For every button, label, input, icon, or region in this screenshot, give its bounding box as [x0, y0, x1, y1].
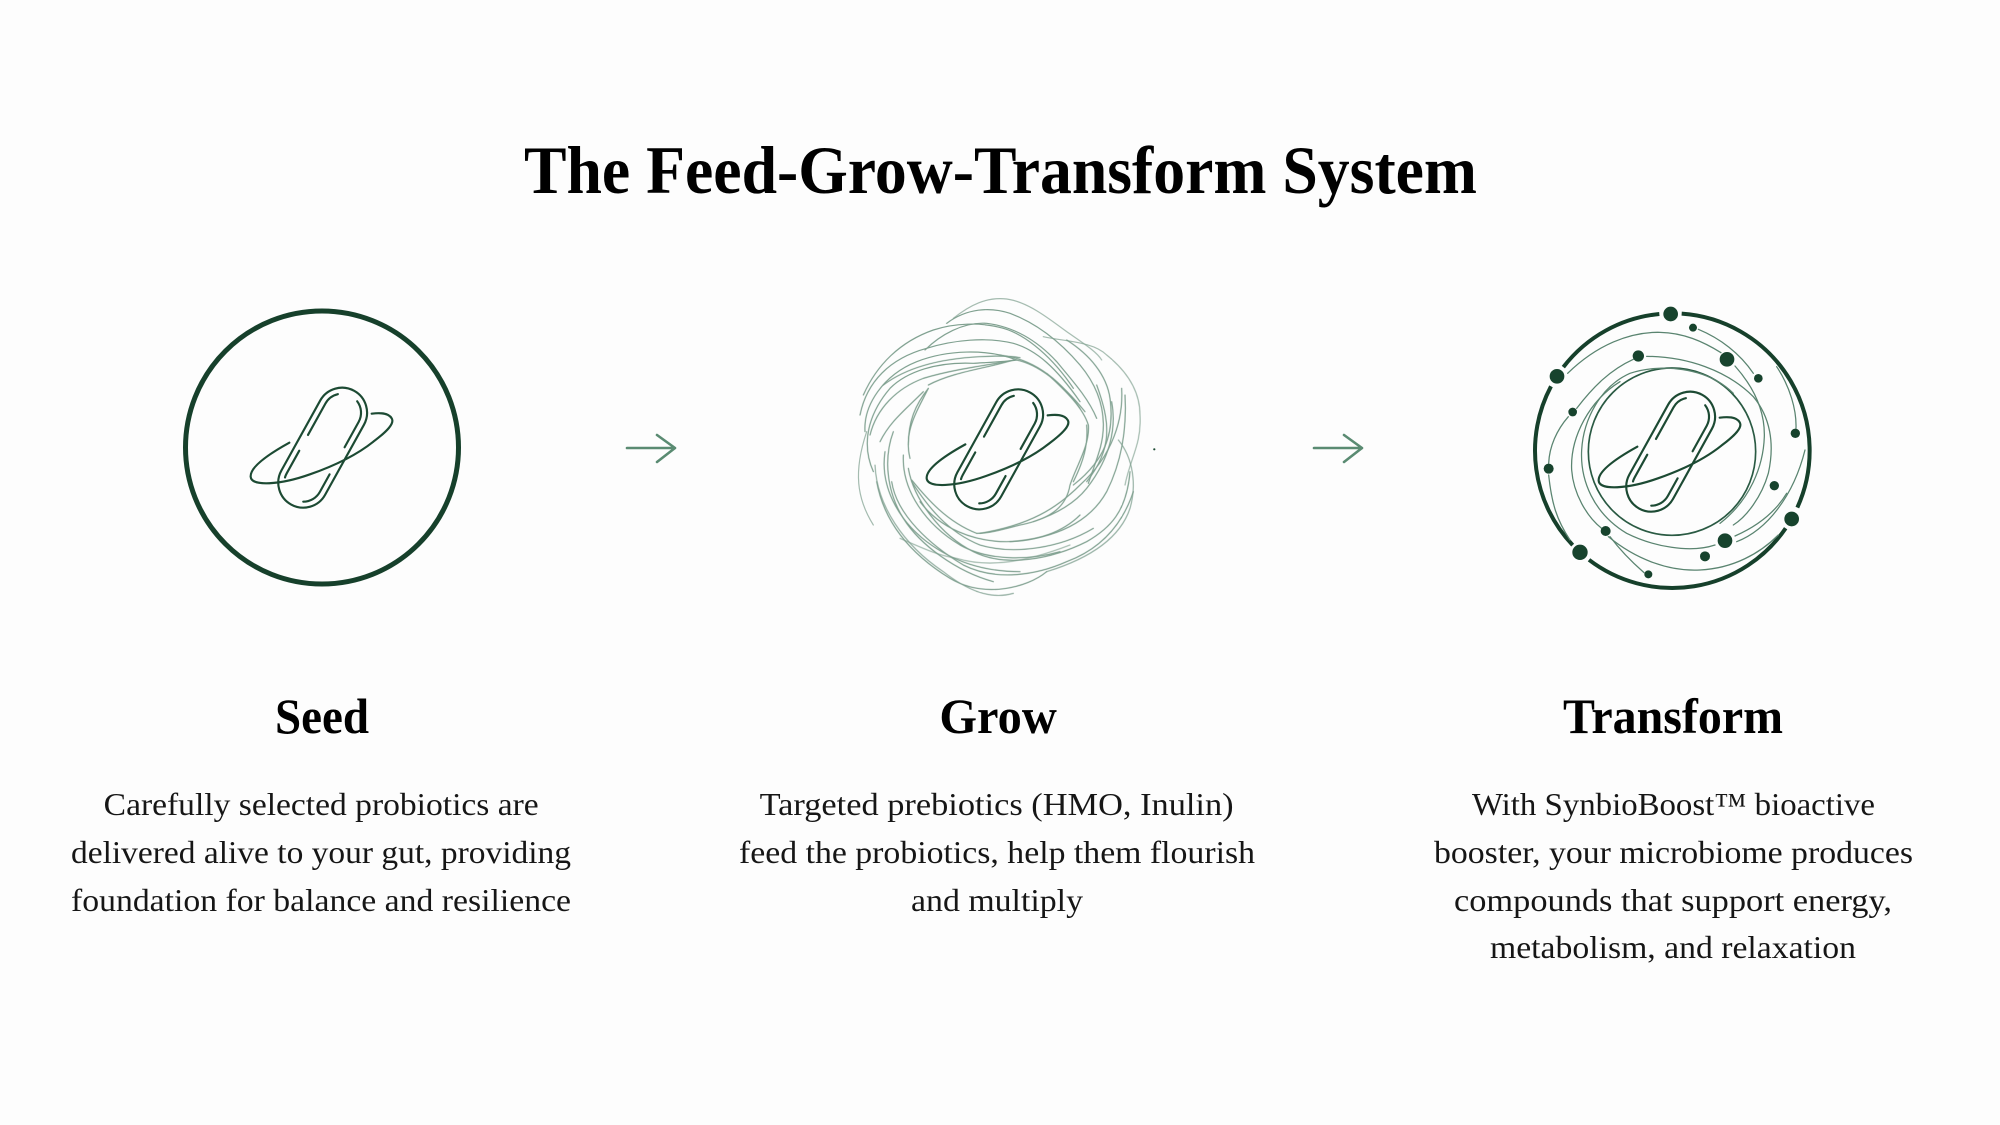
- panel: grow: [739, 688, 1255, 918]
- text block: transform description: compounds that support energy,: [1454, 882, 1892, 918]
- panel: seed: [71, 688, 571, 918]
- text block: transform description: metabolism, and relaxation: [1490, 929, 1856, 965]
- text block: seed description: Carefully selected probiotics are: [104, 786, 539, 822]
- text block: transform description: booster, your microbiome produces: [1434, 834, 1913, 870]
- text block: transform description: With SynbioBoost™ bioactive: [1472, 786, 1875, 822]
- heading: transform: Transform: [1563, 688, 1783, 744]
- text block: seed description: foundation for balance and resilience: [71, 882, 571, 918]
- text block: transform description: [1434, 786, 1913, 965]
- text block: grow description: [739, 786, 1255, 918]
- panel: transform: [1434, 688, 1913, 965]
- arrow: seed to grow: [627, 435, 675, 462]
- arrow: grow to transform: [1314, 435, 1362, 462]
- text block: seed description: delivered alive to your gut, providing: [71, 834, 571, 870]
- heading: seed: Seed: [275, 688, 369, 744]
- title: The Feed-Grow-Transform System: [524, 132, 1477, 208]
- text block: seed description: [71, 786, 571, 918]
- icon: transform orbit ring with capsule: [1535, 307, 1810, 588]
- heading: grow: Grow: [939, 688, 1057, 744]
- text block: grow description: and multiply: [911, 882, 1083, 918]
- icon: grow swirl with capsule: [858, 299, 1155, 595]
- icon: seed circle with capsule: [186, 311, 458, 584]
- text block: grow description: Targeted prebiotics (HMO, Inulin): [760, 786, 1234, 822]
- text block: grow description: feed the probiotics, help them flourish: [739, 834, 1255, 870]
